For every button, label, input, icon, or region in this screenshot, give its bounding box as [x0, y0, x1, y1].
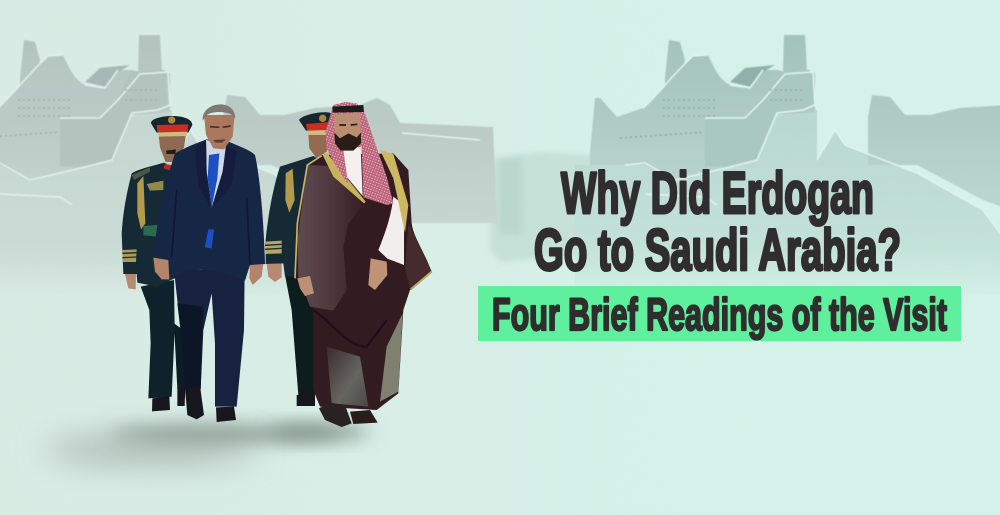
figure: bin Salman [295, 102, 432, 427]
figure: left guard [122, 116, 192, 411]
figure: right guard [265, 112, 332, 406]
figures group [122, 102, 432, 427]
background fort, left (grey) [0, 35, 497, 295]
faint mid-ground ruins [490, 152, 640, 262]
title [534, 161, 901, 283]
ground shadow [45, 425, 370, 468]
figure: Erdogan [153, 104, 265, 422]
background fort, right (green tint) [575, 35, 1000, 295]
